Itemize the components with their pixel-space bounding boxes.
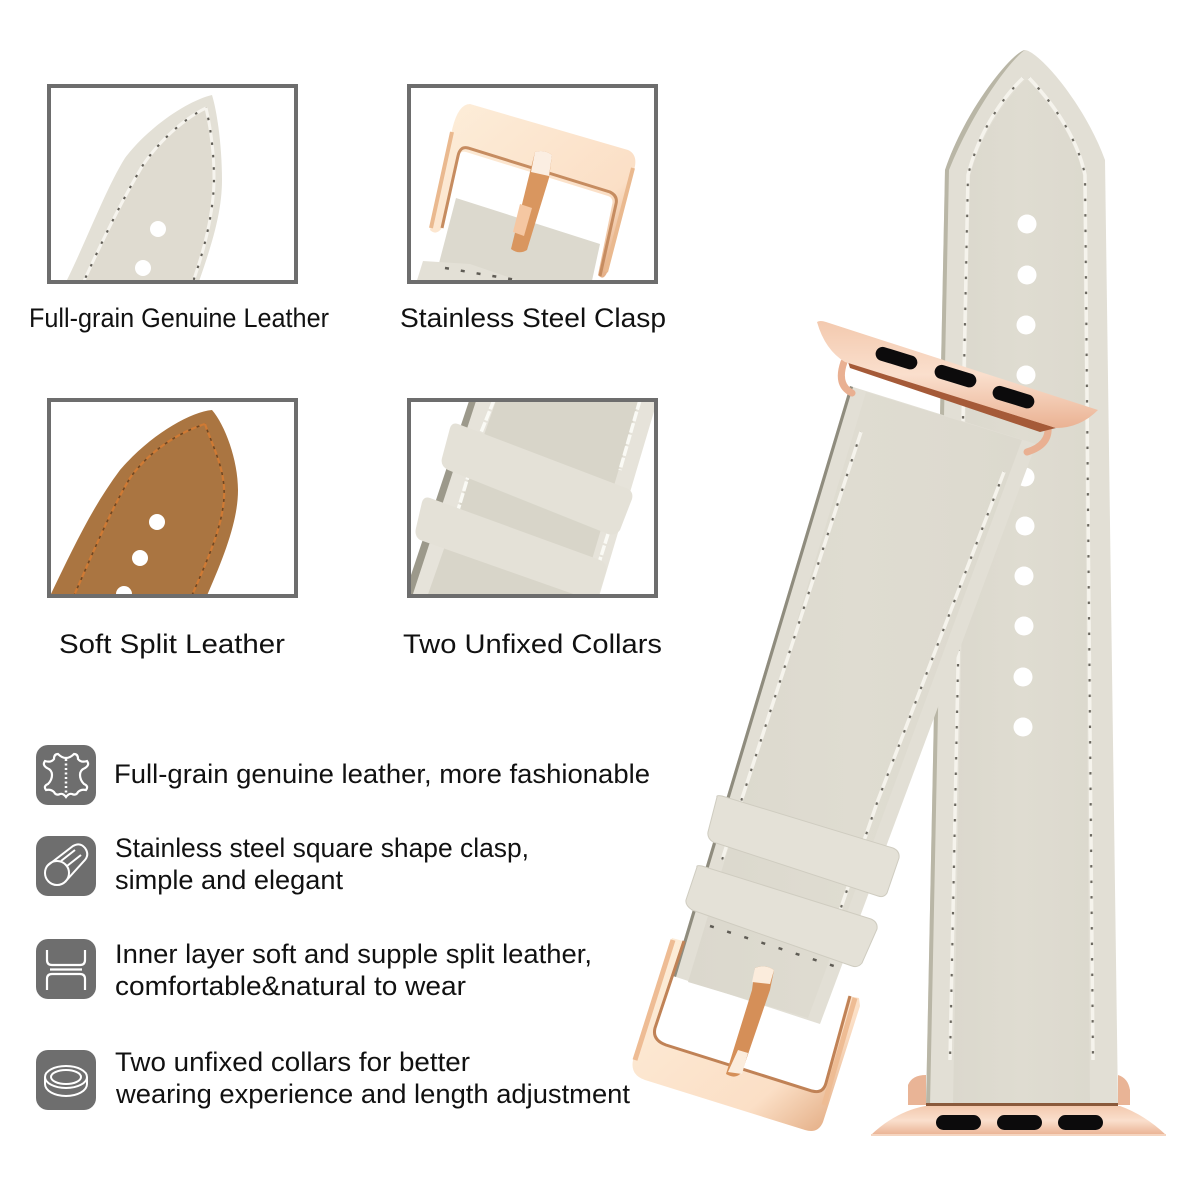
collar 1 [708,796,899,897]
strap holes [1014,214,1036,736]
caption: full-grain leather: Full-grain Genuine Leather [29,303,329,333]
text: clasp feature: simple and elegant [115,865,344,895]
icon: inner layer [36,939,96,999]
text: collars feature [115,1047,631,1109]
text: split leather feature [115,939,592,1001]
panel: two unfixed collars thumbnail [406,398,658,602]
text: split leather feature: Inner layer soft and supple split leather, [115,939,592,969]
collar 2 [686,866,877,967]
icon: leather hide [36,745,96,805]
icon: steel cylinder [36,836,96,896]
text: collars feature: Two unfixed collars for better [115,1047,470,1077]
bottom connector [871,1075,1166,1135]
icon: collar ring [36,1050,96,1110]
long strap [926,50,1118,1106]
text: clasp feature: Stainless steel square shape clasp, [115,833,529,863]
text: collars feature: wearing experience and length adjustment [115,1079,631,1109]
text: split leather feature: comfortable&natural to wear [115,971,466,1001]
buckle [632,938,860,1131]
caption: soft split leather: Soft Split Leather [59,629,285,659]
panel: full-grain leather thumbnail [49,86,296,290]
caption: stainless steel clasp: Stainless Steel Clasp [400,303,666,333]
text: clasp feature [115,833,529,895]
panel: stainless steel clasp thumbnail [409,86,656,290]
panel: soft split leather thumbnail [48,400,296,602]
caption: two unfixed collars: Two Unfixed Collars [403,629,662,659]
short strap [673,386,1036,1024]
top connector [817,321,1098,452]
text: full-grain feature: Full-grain genuine leather, more fashionable [114,759,650,789]
